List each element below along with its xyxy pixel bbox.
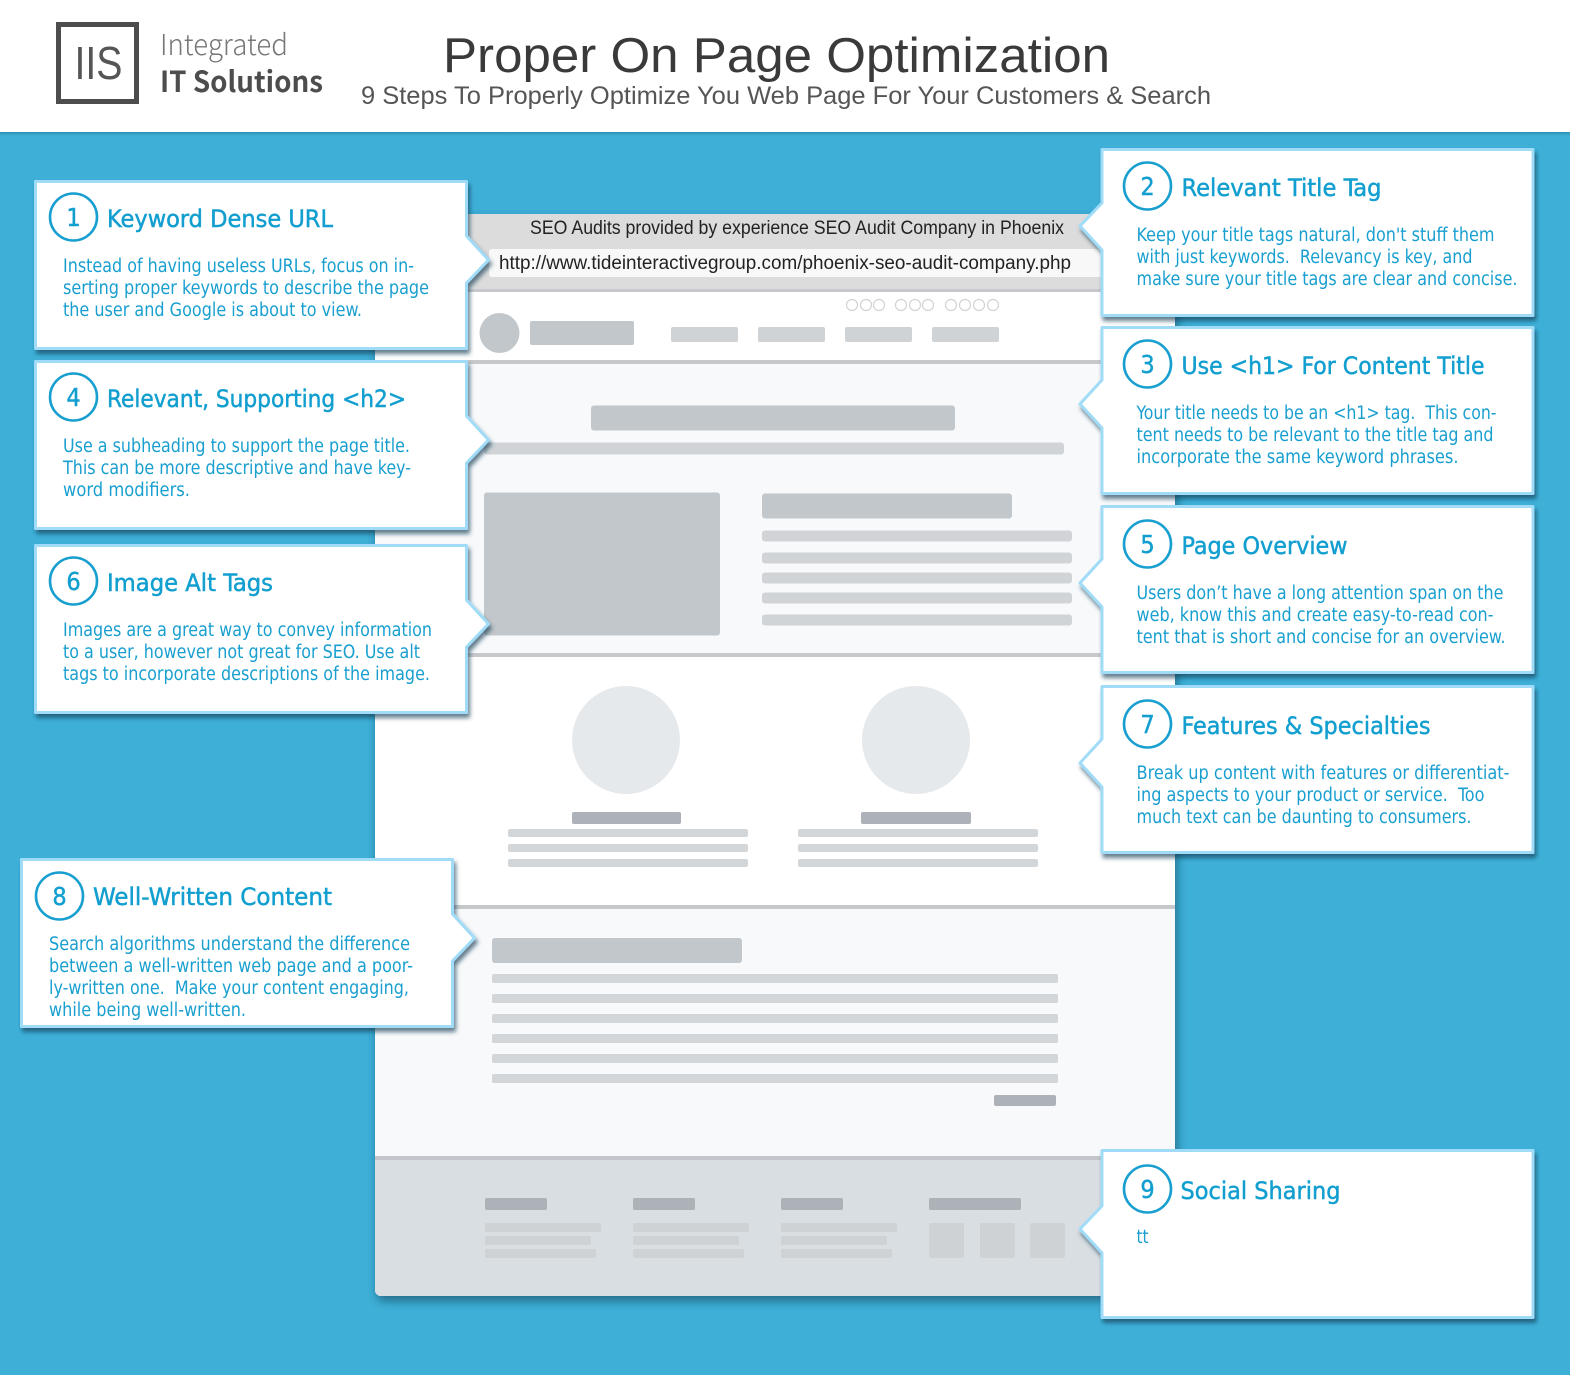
header band <box>0 0 1570 136</box>
body 5: Users don’t have a long attention span on the <box>1136 583 1504 604</box>
hero section <box>375 360 1175 653</box>
content section <box>375 905 1175 1156</box>
body 8: between a well-written web page and a poor- <box>49 956 413 977</box>
body 2: make sure your title tags are clear and concise. <box>1136 269 1518 290</box>
body 1: Instead of having useless URLs, focus on in- <box>63 256 414 277</box>
browser bar <box>375 214 1175 292</box>
badge 7 <box>1124 700 1171 748</box>
badge 8: 8 <box>52 882 67 911</box>
badge 3 <box>1124 340 1171 388</box>
body 8: ly-written one. Make your content engaging, <box>49 978 409 999</box>
callout 2: Relevant Title Tag <box>1080 150 1533 316</box>
body 4: word modifiers. <box>63 480 190 501</box>
features section <box>375 653 1175 867</box>
browser title: SEO Audits provided by experience SEO Audit Company in Phoenix <box>530 218 1064 239</box>
body 6 <box>63 620 432 685</box>
callout 9: Social Sharing <box>1080 1150 1533 1318</box>
body 2 <box>1136 225 1518 290</box>
badge 2 <box>1124 162 1171 210</box>
heading 3: Use <h1> For Content Title <box>1182 352 1484 380</box>
callout 8: Well-Written Content <box>22 860 474 1026</box>
body 8 <box>49 934 413 1021</box>
badge 8 <box>36 872 83 920</box>
logo wordmark <box>160 22 323 101</box>
callout 5: Page Overview <box>1080 506 1533 672</box>
badge 4: 4 <box>66 383 81 412</box>
subtitle: 9 Steps To Properly Optimize You Web Page For Your Customers & Search <box>361 82 1211 110</box>
title: Proper On Page Optimization <box>443 29 1110 83</box>
logo wordmark: IT Solutions <box>160 59 323 101</box>
body 8: Search algorithms understand the difference <box>49 934 410 955</box>
badge 5: 5 <box>1140 530 1155 559</box>
body 7: much text can be daunting to consumers. <box>1136 807 1472 828</box>
body 3 <box>1136 403 1496 468</box>
badge 3: 3 <box>1140 350 1155 379</box>
body 6: Images are a great way to convey information <box>63 620 432 641</box>
body 5: tent that is short and concise for an overview. <box>1136 627 1506 648</box>
callout 4: Relevant, Supporting h2 <box>36 362 488 528</box>
logo wordmark: Integrated <box>160 22 288 64</box>
badge 7: 7 <box>1140 710 1155 739</box>
callout 3: Use h1 For Content Title <box>1080 328 1533 494</box>
body 2: with just keywords. Relevancy is key, and <box>1136 247 1472 268</box>
heading 8: Well-Written Content <box>93 883 332 911</box>
callout 1: Keyword Dense URL <box>36 182 488 348</box>
heading 1: Keyword Dense URL <box>107 205 333 233</box>
badge 1 <box>50 194 97 240</box>
page body <box>375 214 1175 1296</box>
callout 6: Image Alt Tags <box>36 546 488 712</box>
body 1 <box>63 256 429 321</box>
heading 2: Relevant Title Tag <box>1182 174 1382 202</box>
logo mark <box>58 24 136 102</box>
body 3: tent needs to be relevant to the title tag and <box>1136 425 1494 446</box>
badge 4 <box>50 374 97 420</box>
body 1: the user and Google is about to view. <box>63 300 362 321</box>
body 4 <box>62 436 411 501</box>
body 5 <box>1136 583 1506 648</box>
body 7: ing aspects to your product or service. Too <box>1136 785 1484 806</box>
body 5: web, know this and create easy-to-read con- <box>1136 605 1494 626</box>
footer section <box>375 1156 1175 1296</box>
webpage wireframe <box>375 214 1175 1296</box>
body 4: Use a subheading to support the page title. <box>63 436 410 457</box>
body 4: This can be more descriptive and have key- <box>62 458 411 479</box>
nav section <box>480 300 999 353</box>
body 1: serting proper keywords to describe the page <box>63 278 429 299</box>
badge 5 <box>1124 520 1171 568</box>
badge 1: 1 <box>66 203 81 232</box>
badge 9 <box>1124 1166 1171 1212</box>
body 3: Your title needs to be an <h1> tag. This con- <box>1136 403 1496 424</box>
body 2: Keep your title tags natural, don't stuff them <box>1136 225 1494 246</box>
body 3: incorporate the same keyword phrases. <box>1136 447 1458 468</box>
body 8: while being well-written. <box>49 1000 246 1021</box>
logo <box>58 22 323 102</box>
body 6: tags to incorporate descriptions of the image. <box>63 664 430 685</box>
callout 7: Features & Specialties <box>1080 686 1533 852</box>
body 7: Break up content with features or differentiat- <box>1136 763 1510 784</box>
heading 6: Image Alt Tags <box>107 569 273 597</box>
body 9: tt <box>1136 1227 1149 1248</box>
badge 2: 2 <box>1140 172 1155 201</box>
logo mark: IIS <box>74 37 122 89</box>
badge 9: 9 <box>1140 1175 1155 1204</box>
heading 5: Page Overview <box>1182 532 1348 560</box>
badge 6 <box>50 558 97 604</box>
body 6: to a user, however not great for SEO. Use alt <box>63 642 420 663</box>
body 7 <box>1136 763 1510 828</box>
heading 9: Social Sharing <box>1180 1177 1340 1205</box>
browser url: http://www.tideinteractivegroup.com/phoenix-seo-audit-company.php <box>499 253 1071 274</box>
badge 6: 6 <box>66 567 81 596</box>
heading 4: Relevant, Supporting <h2> <box>107 385 406 413</box>
heading 7: Features & Specialties <box>1182 712 1430 740</box>
